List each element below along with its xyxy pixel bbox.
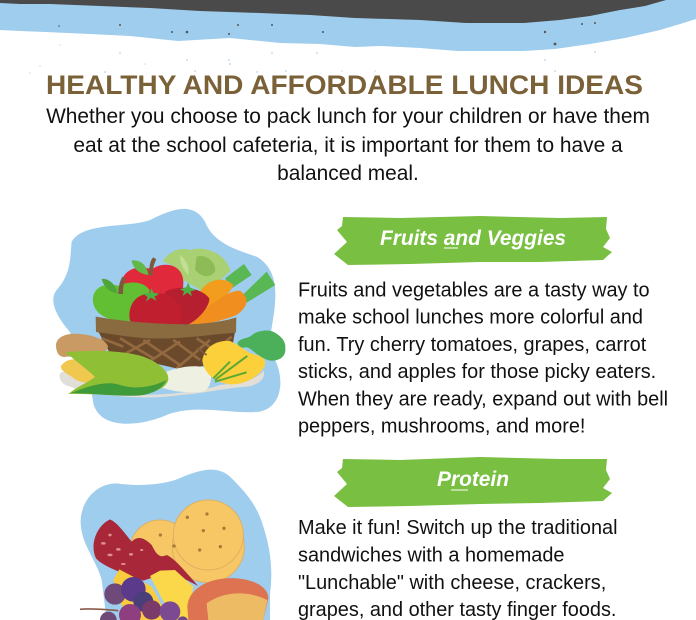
text: protein: Make it fun! Switch up the traditional (298, 517, 618, 539)
text: fruits and veggies: When they are ready, expand out with bell (298, 388, 668, 410)
text: protein (298, 517, 618, 620)
heading banner: Fruits and Veggies (334, 216, 612, 265)
heading banner: Fruits and Veggies: Fruits and Veggies (380, 227, 566, 250)
illustration: vegetable basket (53, 209, 285, 424)
yellow pepper (197, 341, 265, 384)
intro text: balanced meal. (277, 162, 419, 185)
red apple (122, 257, 183, 303)
cheese wedges (113, 569, 193, 620)
shadow (60, 371, 264, 397)
text: protein: sandwiches with a homemade (298, 544, 564, 566)
text: fruits and veggies: Fruits and vegetables are a tasty way to (298, 280, 650, 302)
blue blob (53, 209, 280, 424)
radish (160, 366, 211, 392)
text: fruits and veggies: make school lunches more colorful and (298, 306, 643, 328)
grapes (80, 577, 188, 620)
text: fruits and veggies: peppers, mushrooms, and more! (298, 416, 585, 438)
corn (61, 359, 98, 383)
intro text: Whether you choose to pack lunch for your children or have them (46, 105, 650, 128)
header: chalkboard and blue brush band (0, 0, 696, 74)
intro text: eat at the school cafeteria, it is important for them to have a (73, 134, 623, 157)
corn husk (65, 351, 168, 395)
text: fruits and veggies (298, 280, 668, 438)
heading banner: Protein (334, 457, 612, 507)
text: fruits and veggies: sticks, and apples for those picky eaters. (298, 361, 656, 383)
title: HEALTHY AND AFFORDABLE LUNCH IDEAS (46, 70, 643, 100)
heading banner: Protein: Protein (437, 468, 509, 491)
intro text (46, 105, 650, 185)
illustration: snack plate (80, 470, 271, 620)
cheese wheel (187, 578, 268, 620)
potato (56, 334, 108, 357)
broccoli (237, 331, 285, 361)
crackers (130, 500, 244, 583)
green apple (93, 277, 150, 322)
salami (94, 519, 198, 586)
lettuce (163, 249, 231, 292)
text: fruits and veggies: fun. Try cherry tomatoes, grapes, carrot (298, 334, 647, 356)
text: protein: "Lunchable" with cheese, crackers, (298, 572, 606, 594)
basket (96, 317, 236, 370)
blue blob (81, 470, 271, 620)
carrots (187, 264, 275, 325)
tomatoes (129, 283, 209, 325)
